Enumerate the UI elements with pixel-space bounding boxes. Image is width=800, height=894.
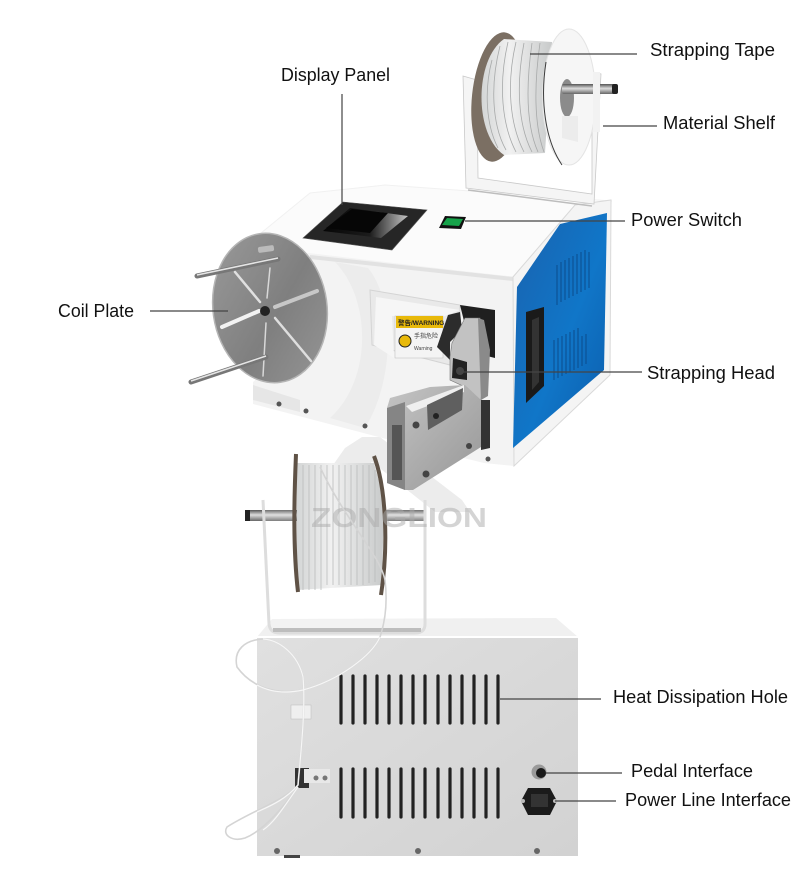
rear machine body bbox=[257, 618, 578, 858]
icon: power line socket bbox=[521, 788, 557, 815]
heat dissipation vents bbox=[341, 676, 498, 817]
label: heat dissipation hole: Heat Dissipation Hole bbox=[613, 686, 788, 707]
strapping head bbox=[387, 312, 490, 490]
label: pedal interface: Pedal Interface bbox=[631, 760, 753, 781]
lower tape spool bbox=[294, 454, 385, 595]
warning label: Warning bbox=[414, 346, 433, 352]
icon: power switch bbox=[439, 216, 466, 229]
watermark: brand name: ZONGLION bbox=[311, 502, 487, 533]
machine side frame bbox=[513, 200, 611, 466]
label: strapping tape: Strapping Tape bbox=[650, 39, 775, 60]
label: power switch: Power Switch bbox=[631, 209, 742, 230]
head recess bbox=[370, 290, 460, 370]
icon: display panel bbox=[303, 202, 427, 250]
material shelf bracket bbox=[463, 72, 601, 206]
rear bracket clip bbox=[291, 705, 311, 719]
thin cable bbox=[226, 467, 386, 839]
blue side panel bbox=[513, 213, 607, 448]
coil plate bbox=[191, 226, 337, 390]
rear terminal bbox=[295, 768, 330, 788]
machine base rail bbox=[253, 385, 300, 412]
watermark: logo mark bbox=[305, 437, 470, 512]
base screws bbox=[274, 848, 540, 854]
label: coil plate: Coil Plate bbox=[58, 300, 134, 321]
label: strapping head: Strapping Head bbox=[647, 362, 775, 383]
label: material shelf: Material Shelf bbox=[663, 112, 776, 133]
lower shelf bracket and rod bbox=[245, 500, 425, 633]
strapping tape spool bbox=[465, 29, 618, 165]
warning label: 手指危险 bbox=[414, 332, 438, 340]
dark head panel bbox=[460, 305, 495, 358]
plate rods bbox=[197, 259, 278, 276]
plate slots bbox=[222, 268, 317, 376]
main strapping machine bbox=[253, 185, 612, 490]
side handle slot bbox=[526, 307, 544, 403]
machine front face bbox=[253, 252, 514, 466]
warning label: 警告/WARNING bbox=[398, 318, 444, 327]
icon: pedal interface bbox=[532, 764, 546, 780]
warning label bbox=[395, 316, 444, 358]
machine top face bbox=[255, 185, 612, 277]
label: display panel: Display Panel bbox=[281, 64, 390, 85]
label: power line interface: Power Line Interface bbox=[625, 789, 791, 810]
